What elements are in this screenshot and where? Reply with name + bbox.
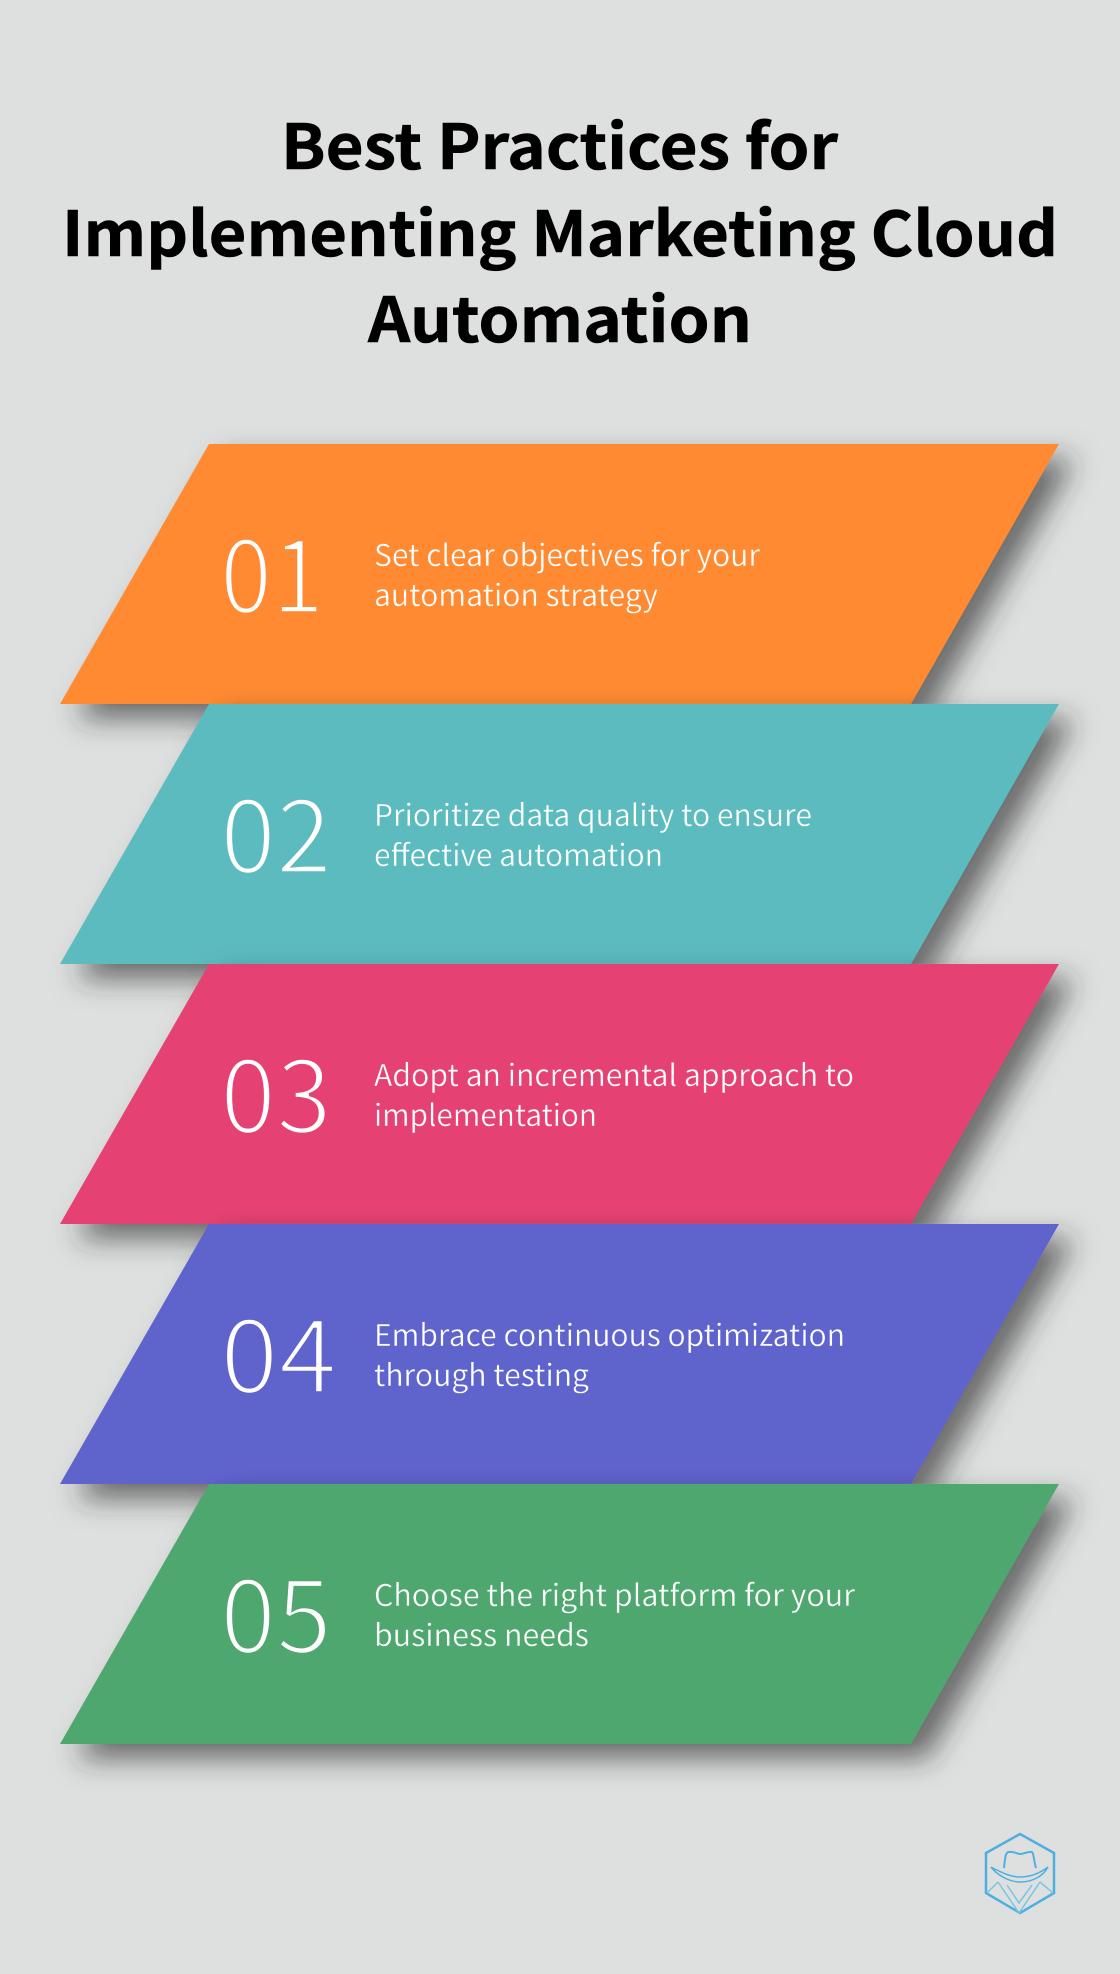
panel: step 01: [60, 444, 1059, 704]
text: step 02: [374, 791, 812, 875]
icon: logo hexagon with hat: [986, 1834, 1054, 1913]
text: step 05: Choose the right platform for your: [374, 1571, 855, 1615]
panel: step 04: [60, 1224, 1059, 1484]
number 02: 02: [220, 754, 332, 903]
text: step 03: Adopt an incremental approach to: [374, 1051, 854, 1095]
panel: step 03: [60, 964, 1059, 1224]
number 05: 05: [220, 1534, 332, 1683]
text: step 02: effective automation: [374, 831, 663, 875]
text: step 05: [374, 1571, 855, 1655]
text: step 04: [374, 1311, 845, 1395]
title: Best Practices for: [281, 97, 839, 187]
panel: step 05: [60, 1484, 1059, 1744]
number 03: 03: [220, 1014, 332, 1163]
title: Implementing Marketing Cloud: [62, 184, 1058, 274]
text: step 04: Embrace continuous optimization: [374, 1311, 845, 1355]
number 04: 04: [220, 1274, 337, 1423]
text: step 01: Set clear objectives for your: [374, 531, 760, 575]
number 01: 01: [220, 494, 324, 643]
text: step 03: [374, 1051, 854, 1135]
panel: step 02: [60, 704, 1059, 964]
text: step 02: Prioritize data quality to ensure: [374, 791, 812, 835]
title: [62, 97, 1058, 360]
text: step 04: through testing: [374, 1351, 589, 1395]
text: step 01: automation strategy: [374, 571, 658, 615]
text: step 05: business needs: [374, 1611, 589, 1655]
text: step 01: [374, 531, 760, 615]
title: Automation: [367, 270, 752, 360]
text: step 03: implementation: [374, 1091, 597, 1135]
